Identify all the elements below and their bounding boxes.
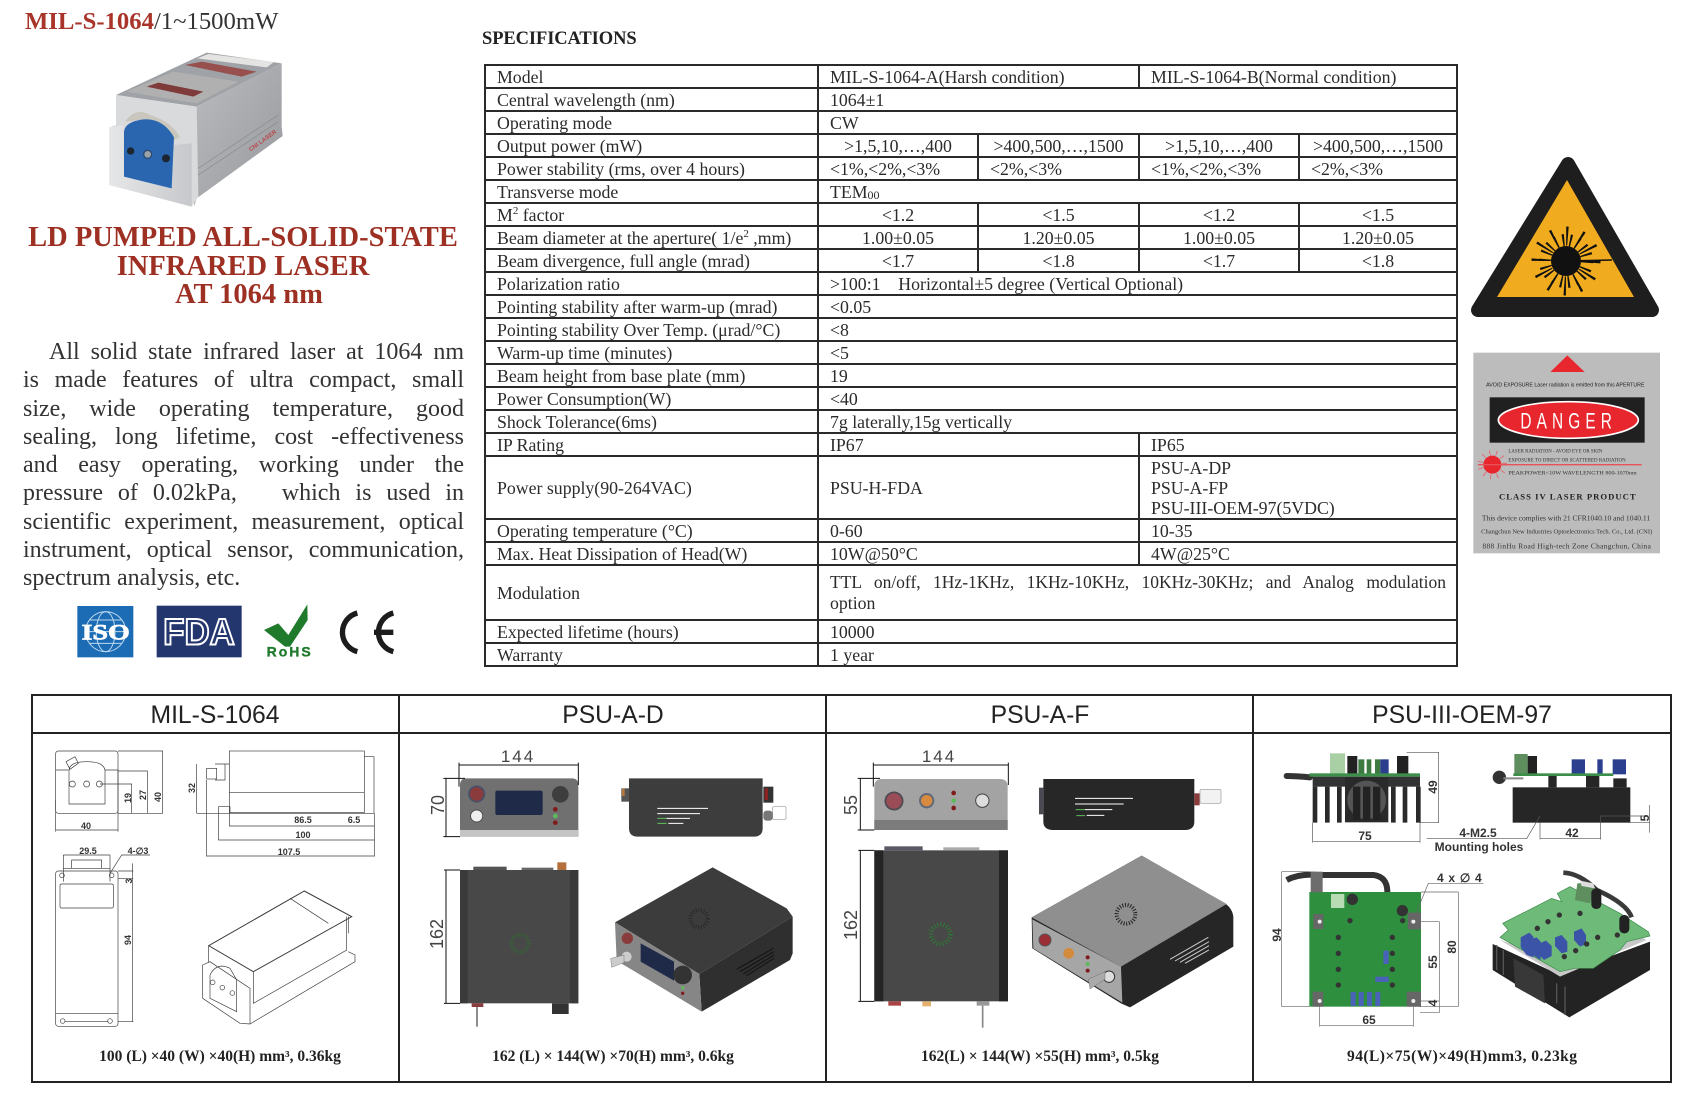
panel: MIL-S-1064: 19	[123, 793, 133, 803]
panel caption: 94(L)×75(W)×49(H)mm3, 0.23kg	[1347, 1048, 1577, 1065]
description paragraph: spectrum analysis, etc.	[23, 565, 240, 591]
specifications table: 1 year	[830, 644, 874, 664]
specifications table: >100:1 Horizontal±5 degree (Vertical Optional)	[830, 274, 1183, 294]
panel: PSU-A-F: 144	[922, 747, 956, 766]
panel caption: 162 (L) × 144(W) ×70(H) mm³, 0.6kg	[492, 1048, 734, 1065]
specifications table: <1%,<2%,<3%	[1151, 158, 1261, 178]
product photo: laser head: CNI LASER	[248, 129, 279, 153]
specifications table: option	[830, 592, 875, 612]
panel: MIL-S-1064: 100	[295, 830, 311, 840]
specifications table: IP65	[1151, 434, 1185, 454]
icon: ISO logo: ISO	[82, 619, 130, 644]
main heading: AT 1064 nm	[175, 279, 323, 310]
panel: MIL-S-1064: 32	[187, 783, 197, 793]
panel: MIL-S-1064: 107.5	[278, 847, 300, 857]
specifications table: Power stability (rms, over 4 hours)	[497, 158, 745, 178]
specifications table: Operating mode	[497, 112, 612, 132]
panel: MIL-S-1064: 86.5	[294, 815, 312, 825]
specifications table: <8	[830, 320, 849, 340]
specifications table: Max. Heat Dissipation of Head(W)	[497, 544, 747, 564]
danger label: PEAKPOWER<10W WAVELENGTH 800-1070nm	[1508, 471, 1638, 477]
specifications table: M2 factor	[497, 204, 564, 224]
specifications table: <2%,<3%	[990, 158, 1062, 178]
specifications table: 19	[830, 366, 848, 386]
specifications table: 1.00±0.05	[1183, 228, 1255, 248]
specifications table: Polarization ratio	[497, 274, 620, 294]
panel: PSU-III-OEM-97: 65	[1362, 1013, 1376, 1027]
danger label: LASER RADIATION - AVOID EYE OR SKIN	[1508, 449, 1602, 455]
specifications table: Shock Tolerance(6ms)	[497, 412, 657, 432]
specifications table: Transverse mode	[497, 182, 618, 202]
panel: PSU-III-OEM-97: 75	[1358, 829, 1372, 843]
product photo: laser head	[109, 52, 283, 206]
danger label: EXPOSURE TO DIRECT OR SCATTERED RADIATION	[1508, 458, 1626, 464]
specifications table: 0-60	[830, 520, 863, 540]
specifications table: <40	[830, 388, 858, 408]
views of PSU-III-OEM-97	[1282, 752, 1650, 1027]
panel: MIL-S-1064: 6.5	[348, 815, 360, 825]
description paragraph	[23, 339, 464, 591]
specifications table: Power supply(90-264VAC)	[497, 478, 692, 498]
specifications heading: SPECIFICATIONS	[482, 29, 637, 49]
specifications table: Expected lifetime (hours)	[497, 622, 679, 642]
icon: CE mark	[342, 613, 393, 652]
danger label: CLASS IV LASER PRODUCT	[1499, 492, 1636, 502]
panel: PSU-III-OEM-97: 42	[1565, 826, 1579, 840]
icon: RoHS check mark: RoHS	[267, 644, 311, 660]
main heading	[28, 222, 458, 310]
description paragraph: sealing, long lifetime, cost -effectiveness	[23, 424, 464, 450]
description paragraph: scientific experiment, measurement, optical	[23, 509, 464, 535]
specifications table: PSU-H-FDA	[830, 478, 923, 498]
danger label: 888 JinHu Road High-tech Zone Changchun, China	[1482, 542, 1652, 551]
panel: PSU-III-OEM-97: 80	[1445, 940, 1459, 954]
specifications table: >1,5,10,…,400	[1165, 136, 1273, 156]
specifications table: PSU-III-OEM-97(5VDC)	[1151, 498, 1335, 518]
specifications table: IP Rating	[497, 434, 564, 454]
description paragraph: size, wide operating temperature, good	[23, 396, 464, 422]
specifications table: 10W@50°C	[830, 544, 918, 564]
specifications table: 10-35	[1151, 520, 1192, 540]
specifications table: <1.2	[882, 204, 914, 224]
specifications table: Modulation	[497, 582, 580, 602]
panel: PSU-III-OEM-97: 4	[1426, 999, 1440, 1006]
panel: MIL-S-1064: 4-∅3	[128, 846, 148, 856]
specifications table: IP67	[830, 434, 864, 454]
danger label: Changchun New Industries Optoelectronics Tech. Co., Ltd. (CNI)	[1481, 528, 1652, 535]
specifications table: Model	[497, 66, 543, 86]
panel: PSU-III-OEM-97	[1270, 702, 1652, 1065]
specifications table: <1.5	[1362, 204, 1394, 224]
specifications table: TTL on/off, 1Hz-1KHz, 1KHz-10KHz, 10KHz-30KHz; and Analog modulation	[830, 572, 1446, 592]
panel: PSU-III-OEM-97: 4 x ∅ 4	[1437, 871, 1482, 885]
specifications table: 1.20±0.05	[1022, 228, 1094, 248]
specifications table: Warranty	[497, 644, 563, 664]
dimension drawings of laser head	[56, 751, 374, 1026]
panel: MIL-S-1064: 94	[123, 935, 133, 945]
specifications table: Pointing stability after warm-up (mrad)	[497, 296, 777, 316]
specifications table: Output power (mW)	[497, 136, 642, 156]
specifications table: <5	[830, 342, 849, 362]
icon: FDA logo: FDA	[163, 610, 235, 652]
panel: PSU-A-D: 70	[428, 795, 448, 815]
specifications table: 7g laterally,15g vertically	[830, 412, 1012, 432]
panel title: PSU-III-OEM-97	[1372, 702, 1552, 729]
danger label	[1473, 352, 1660, 554]
specifications table: PSU-A-FP	[1151, 478, 1228, 498]
specifications table: <1.5	[1042, 204, 1075, 224]
panel caption: 100 (L) ×40 (W) ×40(H) mm³, 0.36kg	[99, 1048, 341, 1065]
specifications table: <1.8	[1042, 250, 1075, 270]
specifications table: Central wavelength (nm)	[497, 90, 675, 110]
specifications table	[484, 64, 1458, 667]
panel title: PSU-A-D	[562, 702, 664, 729]
specifications table: CW	[830, 112, 859, 132]
panel: PSU-A-F: 162	[841, 910, 861, 940]
panel: PSU-A-F	[841, 702, 1233, 1065]
specifications table: Beam height from base plate (mm)	[497, 366, 745, 386]
panel: PSU-III-OEM-97: 5	[1638, 814, 1652, 821]
specifications table: <1.2	[1203, 204, 1235, 224]
specifications table: 1.00±0.05	[862, 228, 934, 248]
icon: ISO logo	[77, 606, 133, 657]
specifications table: <1.8	[1362, 250, 1394, 270]
description paragraph: and easy operating, working under the	[23, 452, 464, 478]
icon: laser warning triangle	[1471, 157, 1659, 317]
specifications table: MIL-S-1064-A(Harsh condition)	[830, 66, 1065, 86]
specifications table: <1.7	[1203, 250, 1235, 270]
specifications table: Pointing stability Over Temp. (μrad/°C)	[497, 320, 780, 340]
panel: PSU-A-D	[427, 702, 793, 1065]
icon: RoHS check mark	[264, 604, 311, 660]
views of PSU-A-F	[858, 763, 1233, 1028]
panel: MIL-S-1064: 27	[138, 790, 148, 800]
panel: PSU-III-OEM-97: 94	[1270, 928, 1284, 942]
specifications table: <1.7	[882, 250, 914, 270]
specifications table: Operating temperature (°C)	[497, 520, 693, 540]
specifications table: >400,500,…,1500	[1313, 136, 1443, 156]
specifications table: Beam divergence, full angle (mrad)	[497, 250, 750, 270]
specifications table: PSU-A-DP	[1151, 458, 1231, 478]
panel: MIL-S-1064: 40	[153, 792, 163, 802]
panel: PSU-A-D: 162	[427, 919, 447, 949]
panel: MIL-S-1064: 40	[81, 821, 91, 831]
views of PSU-A-D	[443, 763, 793, 1027]
specifications table: 1.20±0.05	[1342, 228, 1414, 248]
specifications table: >400,500,…,1500	[993, 136, 1124, 156]
panel title: PSU-A-F	[991, 702, 1089, 729]
specifications table: 4W@25°C	[1151, 544, 1230, 564]
panel caption: 162(L) × 144(W) ×55(H) mm³, 0.5kg	[921, 1048, 1159, 1065]
specifications table: 1064±1	[830, 90, 884, 110]
danger word: DANGER	[1520, 410, 1617, 434]
specifications table: MIL-S-1064-B(Normal condition)	[1151, 66, 1396, 86]
specifications table: Beam diameter at the aperture( 1/e2 ,mm)	[497, 228, 791, 248]
description paragraph: is made features of ultra compact, small	[23, 367, 464, 393]
panel: PSU-III-OEM-97: 4-M2.5	[1459, 826, 1497, 840]
main heading: LD PUMPED ALL-SOLID-STATE	[28, 222, 458, 253]
panel: PSU-A-D: 144	[501, 747, 535, 766]
description paragraph: pressure of 0.02kPa, which is used in	[23, 480, 464, 506]
panel: PSU-III-OEM-97: 55	[1426, 955, 1440, 969]
main heading: INFRARED LASER	[117, 250, 369, 282]
danger label: AVOID EXPOSURE Laser radiation is emitted from this APERTURE	[1486, 383, 1645, 389]
model title: MIL-S-1064/1~1500mW	[25, 8, 278, 35]
specifications table: <1%,<2%,<3%	[830, 158, 940, 178]
certification logos	[77, 604, 394, 660]
panel: PSU-III-OEM-97: Mounting holes	[1435, 840, 1524, 854]
description paragraph: instrument, optical sensor, communication,	[23, 537, 464, 563]
specifications table: >1,5,10,…,400	[844, 136, 952, 156]
specifications table: <2%,<3%	[1311, 158, 1383, 178]
specifications table: 10000	[830, 622, 874, 642]
danger label: This device complies with 21 CFR1040.10 and 1040.11	[1482, 514, 1650, 523]
panel title: MIL-S-1064	[151, 702, 279, 729]
panel: PSU-III-OEM-97: 49	[1426, 780, 1440, 794]
specifications table: <0.05	[830, 296, 871, 316]
specifications table: Warm-up time (minutes)	[497, 342, 672, 362]
panel: MIL-S-1064: 29.5	[79, 846, 97, 856]
panel: PSU-A-F: 55	[841, 795, 861, 815]
panel: MIL-S-1064: 3	[124, 878, 134, 884]
specifications table: Power Consumption(W)	[497, 388, 671, 408]
panel: MIL-S-1064	[56, 702, 374, 1065]
specifications table: TEM00	[830, 182, 880, 202]
description paragraph: All solid state infrared laser at 1064 nm	[49, 339, 464, 365]
